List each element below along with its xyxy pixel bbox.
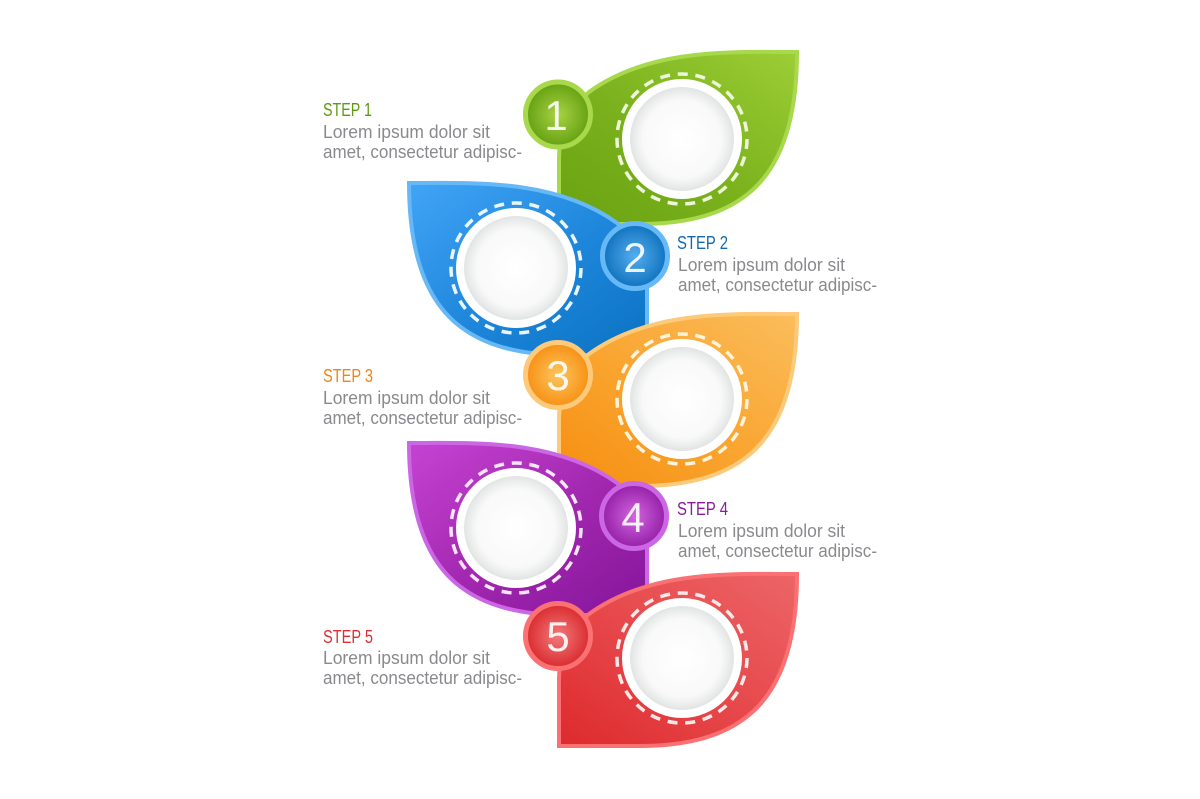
number badge 4: 4 bbox=[621, 494, 645, 541]
text block: step 4: amet, consectetur adipisc- bbox=[678, 541, 877, 561]
dashed ring bbox=[617, 593, 747, 723]
leaf shape: blue bbox=[409, 183, 647, 355]
text block: step 2: amet, consectetur adipisc- bbox=[678, 275, 877, 295]
leaf shape: green bbox=[559, 52, 797, 224]
text block: step 1: Lorem ipsum dolor sit bbox=[323, 122, 490, 142]
text block: step 5: STEP 5 bbox=[323, 627, 373, 647]
text block: step 1 bbox=[323, 100, 522, 162]
text block: step 3: amet, consectetur adipisc- bbox=[323, 408, 522, 428]
text block: step 2 bbox=[677, 233, 877, 295]
white circle placeholder bbox=[456, 468, 576, 588]
white circle placeholder bbox=[622, 79, 742, 199]
text block: step 2: STEP 2 bbox=[677, 233, 728, 253]
leaf shape: orange bbox=[559, 314, 797, 486]
number badge 1: 1 bbox=[544, 92, 568, 139]
text block: step 2: Lorem ipsum dolor sit bbox=[678, 255, 845, 275]
leaf shape: red bbox=[559, 574, 797, 746]
number badge 2 bbox=[602, 224, 668, 288]
panel: step 1 leaf bbox=[559, 52, 797, 224]
white circle placeholder bbox=[456, 208, 576, 328]
panel: step 2 leaf bbox=[409, 183, 647, 355]
text block: step 1: STEP 1 bbox=[323, 100, 372, 120]
panel: step 3 leaf bbox=[559, 314, 797, 486]
text block: step 3 bbox=[323, 366, 522, 428]
number badge 2: 2 bbox=[623, 234, 647, 281]
text block: step 4: STEP 4 bbox=[677, 499, 728, 519]
number badge 5: 5 bbox=[546, 613, 570, 660]
text block: step 5 bbox=[323, 627, 522, 688]
text block: step 1: amet, consectetur adipisc- bbox=[323, 142, 522, 162]
white circle placeholder bbox=[622, 339, 742, 459]
number badge 3: 3 bbox=[546, 352, 570, 399]
dashed ring bbox=[617, 334, 747, 464]
number badge 5 bbox=[526, 604, 590, 668]
text block: step 5: Lorem ipsum dolor sit bbox=[323, 648, 490, 668]
text block: step 3: STEP 3 bbox=[323, 366, 373, 386]
dashed ring bbox=[451, 203, 581, 333]
text block: step 5: amet, consectetur adipisc- bbox=[323, 668, 522, 688]
panel: step 5 leaf bbox=[559, 574, 797, 746]
text block: step 3: Lorem ipsum dolor sit bbox=[323, 388, 490, 408]
white circle placeholder bbox=[622, 598, 742, 718]
number badge 1 bbox=[526, 82, 590, 147]
text block: step 4 bbox=[677, 499, 877, 561]
leaf shape: purple bbox=[409, 443, 647, 615]
number badge 4 bbox=[602, 484, 666, 548]
dashed ring bbox=[617, 74, 747, 204]
panel: step 4 leaf bbox=[409, 443, 647, 615]
number badge 3 bbox=[526, 342, 590, 408]
dashed ring bbox=[451, 463, 581, 593]
text block: step 4: Lorem ipsum dolor sit bbox=[678, 521, 845, 541]
